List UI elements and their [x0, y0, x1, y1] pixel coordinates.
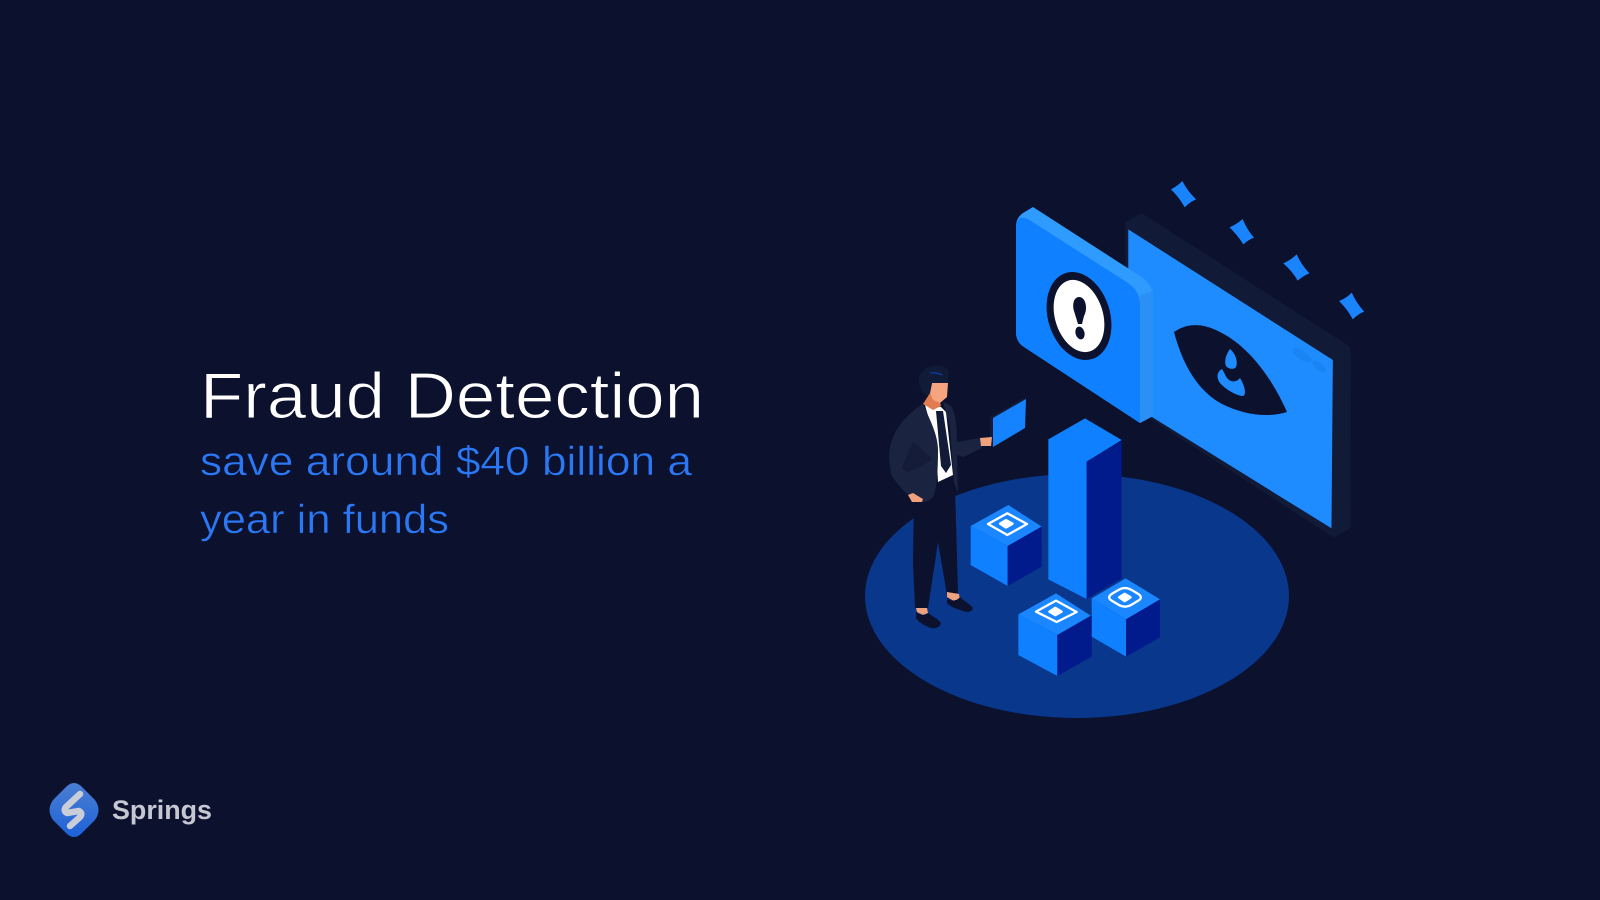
jacket front and sleeve — [889, 404, 938, 502]
trousers — [913, 488, 958, 608]
alert panel — [1016, 207, 1153, 423]
cube: front right — [1092, 578, 1160, 657]
hands — [980, 437, 992, 446]
feet and shoes — [947, 592, 960, 601]
decorative blue sparkles — [1171, 181, 1364, 319]
arm shadow — [902, 442, 932, 472]
subtitle text block — [200, 438, 692, 542]
subtitle text block: save around $40 billion a — [200, 438, 692, 484]
logo: Springs: Springs — [112, 795, 212, 825]
chart bar and cubes — [971, 418, 1160, 676]
subtitle text block: year in funds — [200, 496, 449, 542]
tablet — [990, 397, 1026, 447]
title: Fraud Detection — [200, 359, 704, 432]
head and hair — [930, 383, 948, 403]
logo: Springs — [50, 783, 212, 837]
jacket right and arm — [943, 402, 982, 493]
shirt — [925, 405, 953, 482]
stars and screen — [1126, 181, 1364, 538]
cube: back left — [971, 505, 1042, 586]
cube: front left — [1018, 593, 1092, 676]
tall bar — [1048, 418, 1122, 599]
illustration: fraud detection isometric scene — [865, 181, 1364, 718]
eye on screen — [1174, 325, 1287, 415]
man with tablet — [889, 366, 1026, 628]
warning icon — [1036, 264, 1122, 368]
neck — [923, 393, 941, 410]
tie — [936, 411, 951, 473]
screen frame and face — [1126, 213, 1351, 538]
platform ellipse — [865, 474, 1289, 718]
